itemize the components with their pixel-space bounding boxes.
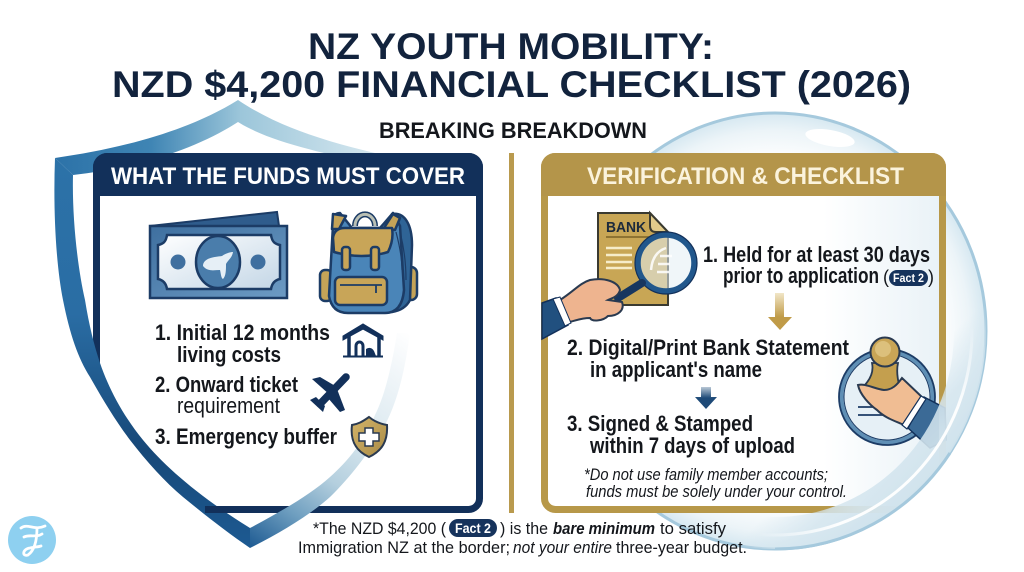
list: verification step 2: in applicant's name	[590, 357, 762, 382]
icon: bank document	[598, 213, 668, 305]
list: verification step 2	[567, 335, 849, 382]
list: funds items: 2. Onward ticket	[155, 372, 298, 397]
note: family accounts warning: *Do not use family member accounts;	[584, 466, 828, 484]
shield right band	[250, 333, 410, 548]
arrow: step 1 to 2	[768, 293, 792, 330]
badge: footnote fact 2: Fact 2	[455, 521, 491, 536]
icon: stamp and hand	[839, 338, 946, 448]
footnote	[298, 519, 747, 557]
note: family accounts warning: funds must be solely under your control.	[586, 483, 847, 501]
icon: bank document: BANK	[606, 220, 647, 236]
list: funds items: requirement	[177, 393, 281, 418]
footnote: three-year budget.	[616, 538, 747, 557]
list: verification step 1: (	[883, 267, 889, 287]
panel header: verification	[541, 153, 946, 196]
title	[112, 26, 911, 105]
list: verification step 2: 2. Digital/Print Bank Statement	[567, 335, 849, 360]
heading: verification and checklist: VERIFICATION & CHECKLIST	[587, 163, 904, 190]
footnote: Immigration NZ at the border;	[298, 538, 510, 557]
icon: backpack	[320, 213, 417, 313]
list: verification step 1: 1. Held for at least 30 days	[703, 242, 930, 267]
shield top behind panel	[55, 100, 375, 175]
badge: footnote fact 2	[449, 519, 497, 537]
title: NZ YOUTH MOBILITY:	[308, 26, 714, 67]
list: funds items: 3. Emergency buffer	[155, 424, 337, 449]
icon: emergency shield	[352, 417, 387, 457]
divider	[509, 153, 514, 513]
list: verification step 1: )	[928, 267, 934, 287]
footnote: *The NZD $4,200 (	[313, 519, 446, 538]
panel bottom edge over shield	[205, 506, 245, 513]
icon: banknote	[150, 212, 287, 298]
list: verification step 3	[567, 411, 795, 458]
title: NZD $4,200 FINANCIAL CHECKLIST (2026)	[112, 64, 911, 105]
list: verification step 1	[703, 242, 934, 288]
arrow: step 2 to 3	[695, 387, 717, 409]
shield left band	[54, 158, 250, 548]
bubble overlay on panel	[578, 127, 972, 549]
list: verification step 3: within 7 days of upload	[589, 433, 795, 458]
badge: fact 2: Fact 2	[893, 273, 924, 285]
panel: what the funds must cover	[93, 153, 483, 510]
mask outside shield	[85, 355, 205, 520]
badge: fact 2	[889, 270, 928, 286]
footnote: bare minimum	[553, 519, 655, 538]
icon: magnifier and hand	[542, 232, 697, 339]
background bubble	[564, 113, 986, 549]
icon: house	[343, 324, 383, 358]
icon: plane	[310, 377, 346, 412]
list: verification step 3: 3. Signed & Stamped	[567, 411, 753, 436]
list: funds items: 1. Initial 12 months	[155, 320, 330, 345]
list: funds items	[155, 320, 337, 449]
panel header: funds	[93, 153, 483, 196]
subtitle: BREAKING BREAKDOWN	[379, 118, 647, 143]
heading: what the funds must cover: WHAT THE FUNDS MUST COVER	[111, 163, 465, 190]
panel: verification and checklist	[541, 153, 946, 510]
note: family accounts warning	[584, 466, 847, 501]
list: funds items: living costs	[177, 342, 281, 367]
footnote: ) is the	[500, 519, 548, 538]
footnote: not your entire	[513, 538, 612, 557]
list: verification step 1: prior to application	[723, 263, 879, 288]
footnote: to satisfy	[660, 519, 726, 538]
icon: logo	[8, 516, 56, 564]
